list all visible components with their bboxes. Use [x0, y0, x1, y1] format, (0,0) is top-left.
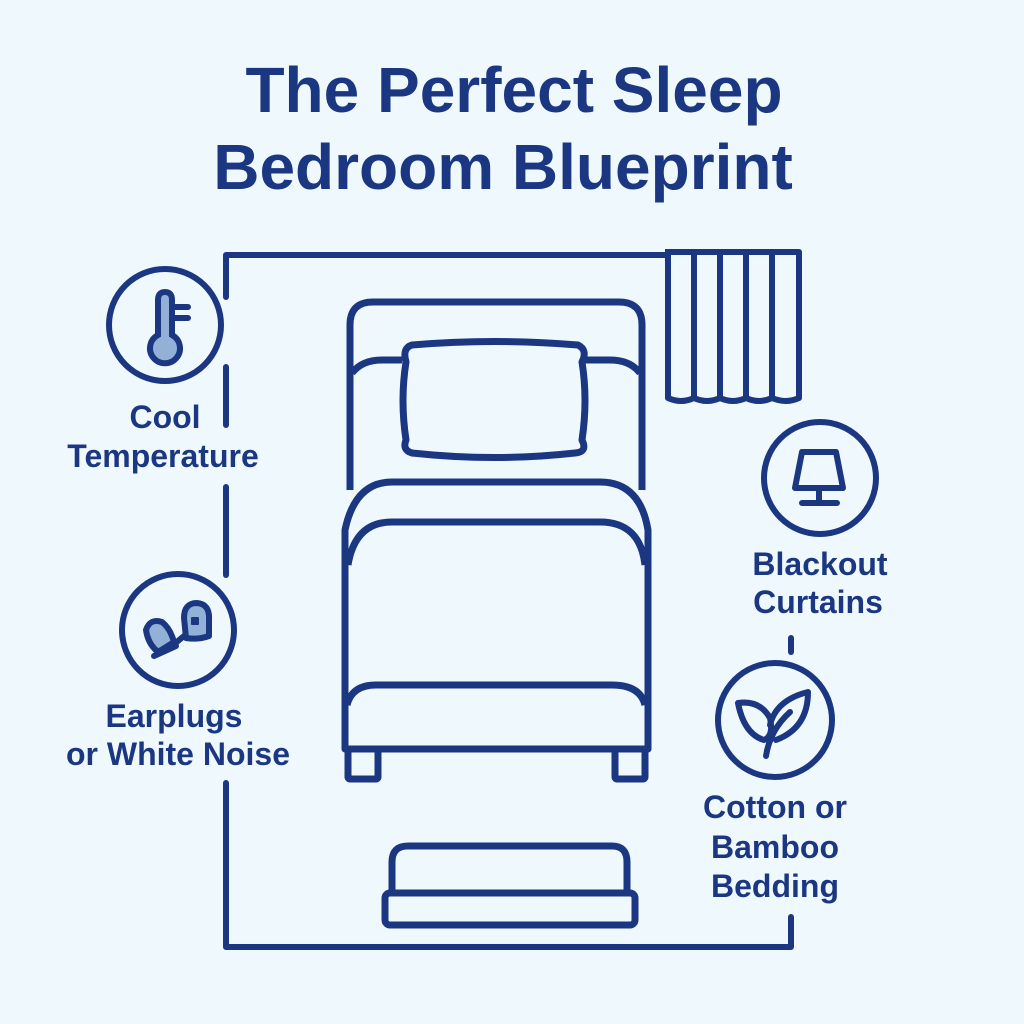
panel: earplugs: Earplugs — [106, 698, 242, 734]
bed — [345, 302, 648, 779]
panel: cool temperature: Temperature — [67, 438, 259, 474]
panel: earplugs — [66, 574, 290, 772]
icon: leaf — [718, 663, 832, 777]
panel: bedding: Bedding — [711, 868, 839, 904]
panel: earplugs: or White Noise — [66, 736, 290, 772]
panel: cool temperature: Cool — [129, 399, 201, 435]
panel: blackout curtains: Blackout — [752, 546, 888, 582]
icon: earplugs — [122, 574, 234, 686]
panel: bedding: Bamboo — [711, 829, 839, 865]
panel: bedding: Cotton or — [703, 789, 847, 825]
pillow — [403, 342, 585, 458]
icon: thermometer — [109, 269, 221, 381]
panel: blackout curtains: Curtains — [753, 584, 883, 620]
rug — [385, 846, 635, 925]
title: Bedroom Blueprint — [213, 131, 793, 203]
panel: cool temperature — [67, 269, 259, 474]
icon: curtains — [665, 252, 799, 401]
icon: lamp — [764, 422, 876, 534]
title: The Perfect Sleep — [245, 54, 783, 126]
room outline — [226, 255, 791, 947]
title — [213, 54, 793, 203]
panel: bedding — [703, 663, 847, 904]
panel: blackout curtains — [752, 422, 888, 620]
